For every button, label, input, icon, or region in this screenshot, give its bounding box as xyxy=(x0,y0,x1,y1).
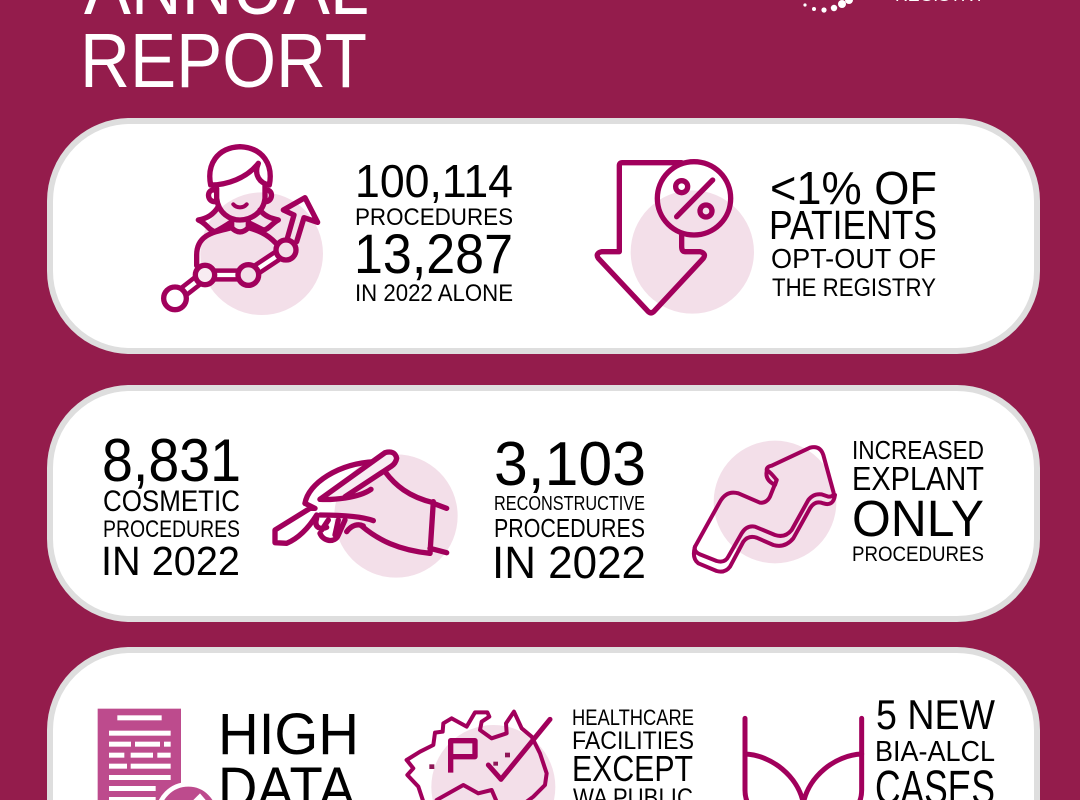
text: cosmetic procedures: COSMETIC xyxy=(103,485,240,518)
icon: woman with rising chart xyxy=(164,147,323,315)
text: opt-out rate: PATIENTS xyxy=(769,202,937,248)
icon: zig-zag up arrow xyxy=(694,441,836,572)
text: procedures totals: IN 2022 ALONE xyxy=(355,280,513,307)
text: explant only procedures xyxy=(852,435,984,566)
icon: down arrow with percent xyxy=(597,162,754,314)
text: cosmetic procedures: 8,831 xyxy=(102,427,241,494)
panel: cosmetic, reconstructive, explant xyxy=(50,388,1037,619)
text: opt-out rate: <1% OF xyxy=(770,162,937,214)
text: procedures totals: PROCEDURES xyxy=(355,204,513,231)
panel: data quality, facilities, BIA-ALCL xyxy=(50,650,1037,800)
text: cosmetic procedures: PROCEDURES xyxy=(103,516,240,543)
text: healthcare facilities: EXCEPT xyxy=(572,748,693,789)
text: healthcare facilities: FACILITIES xyxy=(572,727,694,755)
text: reconstructive procedures: IN 2022 xyxy=(492,537,646,588)
text: cosmetic procedures xyxy=(101,427,241,584)
text: explant only procedures: INCREASED xyxy=(852,435,984,465)
text: healthcare facilities xyxy=(572,705,694,800)
text: BIA-ALCL cases: BIA-ALCL xyxy=(875,736,995,768)
text: procedures totals: 100,114 xyxy=(355,155,513,207)
text: procedures totals xyxy=(354,155,513,307)
text: healthcare facilities: HEALTHCARE xyxy=(572,705,694,730)
icon: bra xyxy=(745,718,862,800)
text: cosmetic procedures: IN 2022 xyxy=(101,538,240,584)
text: BIA-ALCL cases xyxy=(875,691,995,800)
text: procedures totals: 13,287 xyxy=(354,222,513,285)
text: explant only procedures: ONLY xyxy=(852,490,984,547)
icon: Australia map with P and check xyxy=(407,712,555,800)
logo: registry dots and wordmark xyxy=(803,0,985,13)
text: explant only procedures: EXPLANT xyxy=(852,460,984,497)
title: REPORT xyxy=(80,18,367,104)
text: opt-out rate xyxy=(769,162,937,302)
text: reconstructive procedures xyxy=(492,430,646,588)
text: reconstructive procedures: 3,103 xyxy=(494,430,646,499)
text: opt-out rate: OPT-OUT OF xyxy=(771,243,936,274)
icon: hand holding scalpel xyxy=(275,452,458,578)
text: reconstructive procedures: RECONSTRUCTIVE xyxy=(494,493,645,515)
text: high data: HIGH xyxy=(218,702,359,767)
text: reconstructive procedures: PROCEDURES xyxy=(494,513,645,543)
text: BIA-ALCL cases: 5 NEW xyxy=(876,691,995,738)
text: explant only procedures: PROCEDURES xyxy=(852,543,984,566)
panel: procedures and opt-out xyxy=(50,121,1037,351)
icon: data document xyxy=(98,709,219,800)
text: high data xyxy=(218,702,359,800)
text: opt-out rate: THE REGISTRY xyxy=(772,274,936,302)
